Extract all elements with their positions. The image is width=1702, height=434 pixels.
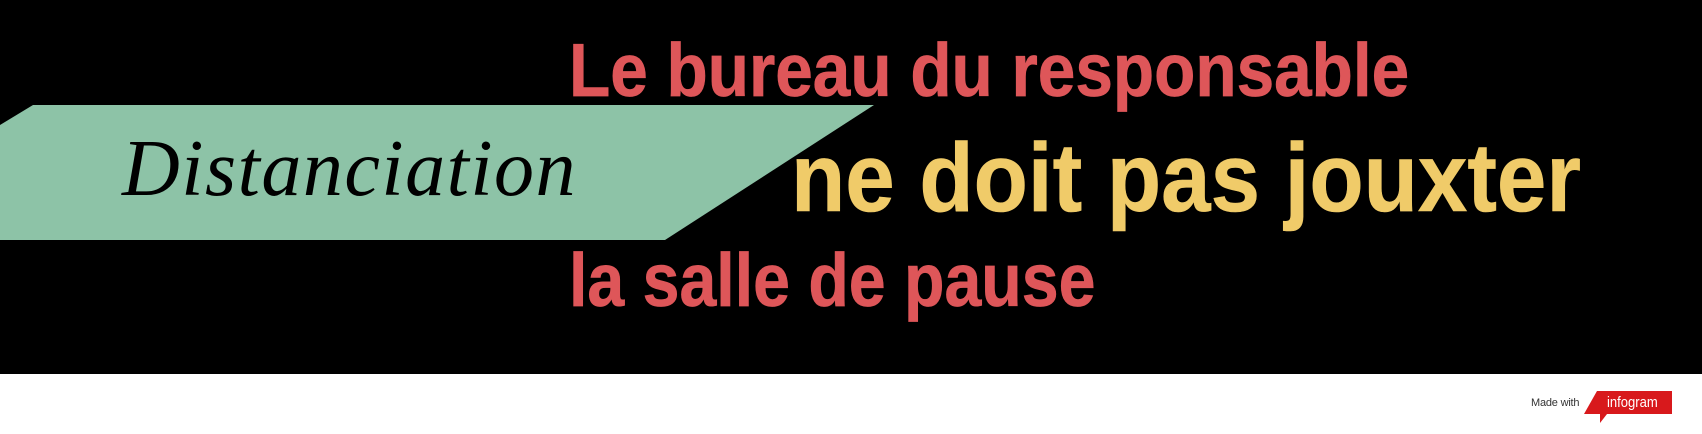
text: line one: Le bureau du responsable [569, 28, 1409, 112]
logo: infogram [1584, 391, 1672, 423]
text: line three: la salle de pause [569, 238, 1095, 322]
text: line two: ne doit pas jouxter [791, 123, 1581, 232]
text: Distanciation: Distanciation [122, 125, 577, 213]
green banner [0, 105, 874, 240]
text: Made with: Made with [1531, 397, 1579, 409]
logo: infogram: infogram [1607, 394, 1658, 411]
